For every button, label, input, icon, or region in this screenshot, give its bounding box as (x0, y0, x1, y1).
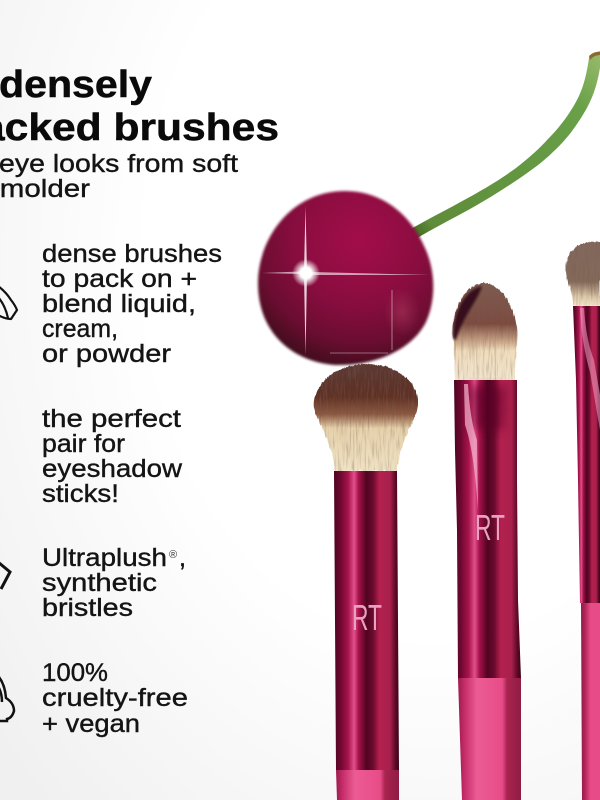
icon: brush tip (0, 286, 17, 319)
feature text: ultraplush: , (179, 544, 186, 572)
feature text: ultraplush: synthetic (42, 569, 157, 597)
feature text: dense brushes: or powder (42, 340, 171, 368)
feature text: perfect pair: sticks! (42, 480, 119, 508)
feature text: perfect pair: the perfect (42, 405, 181, 433)
brush 1 handle (336, 770, 399, 800)
feature text: dense brushes (42, 240, 222, 368)
icon: bunny (0, 677, 14, 721)
feature text: dense brushes: to pack on + (42, 265, 197, 293)
feature text: ultraplush: ® (169, 549, 177, 561)
brush 3 ferrule (573, 306, 600, 603)
brush 2 handle (458, 678, 521, 800)
feature text: cruelty-free: cruelty-free (42, 684, 188, 712)
cherry (258, 191, 433, 365)
feature text: ultraplush: bristles (42, 594, 133, 622)
brush 1 RT logo: RT (352, 597, 382, 638)
feature text: cruelty-free: 100% (42, 659, 108, 687)
feature text: dense brushes: dense brushes (42, 240, 222, 268)
title (0, 64, 279, 149)
brush 3 bristles (566, 242, 600, 306)
brush 2 RT logo: RT (475, 507, 505, 548)
brush 3 handle (581, 603, 600, 800)
feature text: perfect pair: pair for (42, 430, 125, 458)
brush 1 (314, 364, 418, 800)
subtitle: eye looks from soft (0, 150, 238, 178)
brush 3 (566, 242, 600, 800)
feature text: dense brushes: cream, (42, 315, 118, 343)
feature text: ultraplush (42, 544, 186, 622)
title: densely (0, 64, 152, 106)
brush 2 ferrule (454, 380, 521, 678)
brush 2 (453, 283, 521, 800)
brush 2 bristles (453, 283, 517, 380)
feature text: dense brushes: blend liquid, (42, 290, 196, 318)
feature text: ultraplush: Ultraplush (42, 544, 167, 572)
feature text: perfect pair: eyeshadow (42, 455, 183, 483)
subtitle (0, 150, 238, 203)
feature text: cruelty-free (42, 659, 188, 738)
brush 1 ferrule (334, 471, 399, 770)
brush 1 bristles (314, 364, 418, 471)
cherry stem (409, 51, 600, 240)
feature text: cruelty-free: + vegan (42, 710, 140, 738)
feature text: perfect pair (42, 405, 183, 508)
icon: bristle diamond (0, 562, 10, 589)
